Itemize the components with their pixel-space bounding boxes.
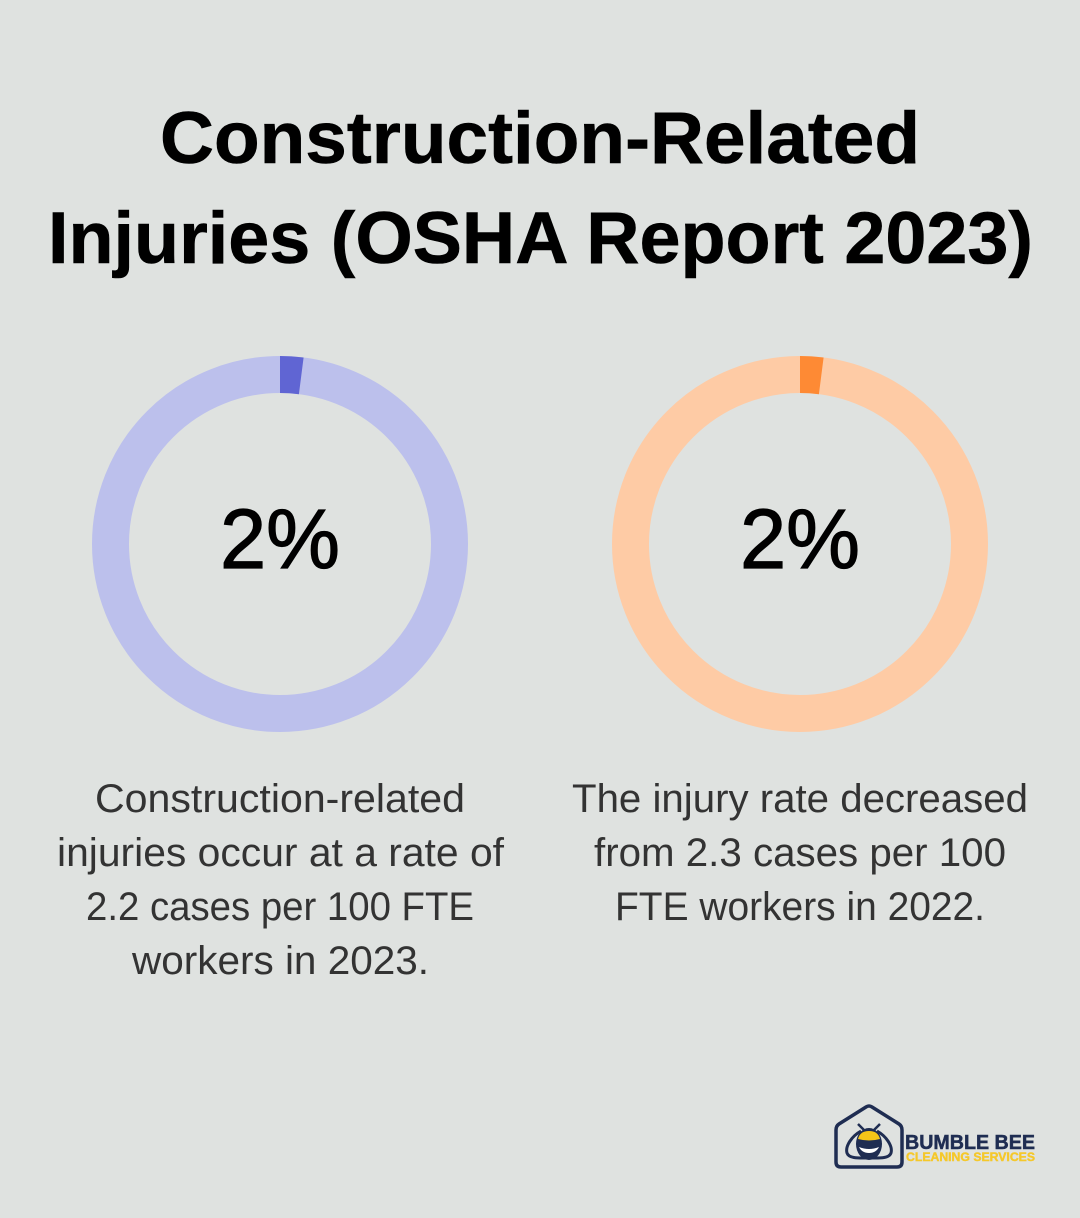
donut chart: orange 2%: 2% xyxy=(740,492,860,586)
logo wordmark: BUMBLE BEE xyxy=(905,1131,1035,1154)
description: 2023 rate: injuries occur at a rate of xyxy=(57,831,505,875)
title: Construction-Related xyxy=(160,98,920,179)
description: 2023 rate: workers in 2023. xyxy=(131,939,429,983)
description: 2023 rate xyxy=(57,777,505,983)
panel: construction-related injury rate xyxy=(57,356,505,983)
title xyxy=(48,98,1033,279)
donut chart: orange 2% xyxy=(630,356,970,714)
description: 2022 comparison: from 2.3 cases per 100 xyxy=(594,831,1006,875)
logo: Bumble Bee Cleaning Services xyxy=(836,1106,1035,1167)
panel: injury rate decrease xyxy=(572,356,1028,929)
description: 2022 comparison xyxy=(572,777,1028,929)
donut chart: blue 2%: 2% xyxy=(220,492,340,586)
donut chart: blue 2% xyxy=(110,356,450,714)
logo tagline: CLEANING SERVICES xyxy=(906,1152,1035,1164)
description: 2023 rate: 2.2 cases per 100 FTE xyxy=(86,885,474,929)
description: 2023 rate: Construction-related xyxy=(95,777,465,821)
description: 2022 comparison: FTE workers in 2022. xyxy=(615,885,985,929)
description: 2022 comparison: The injury rate decreased xyxy=(572,777,1028,821)
icon: house with bee xyxy=(836,1106,902,1167)
title: Injuries (OSHA Report 2023) xyxy=(48,198,1033,279)
